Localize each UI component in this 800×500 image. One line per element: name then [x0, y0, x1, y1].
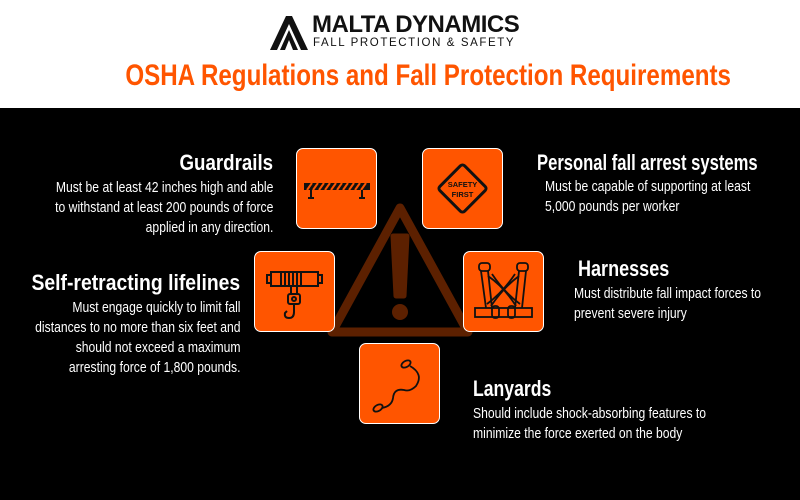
icon box: harness	[463, 251, 544, 332]
logo	[270, 11, 519, 50]
header band	[0, 0, 800, 108]
text: self-retracting lifelines	[31, 270, 240, 376]
text: harnesses: Harnesses	[578, 256, 669, 281]
text: self-retracting lifelines: Must engage quickly to limit fall	[72, 299, 240, 316]
icon box: lanyard	[359, 343, 440, 424]
text: lanyards: minimize the force exerted on the body	[473, 425, 682, 442]
icon box: guardrail	[296, 148, 377, 229]
text: guardrails: to withstand at least 200 pounds of force	[55, 199, 273, 216]
text: personal fall arrest systems: Personal fall arrest systems	[537, 150, 758, 175]
warning triangle	[328, 204, 472, 336]
text: self-retracting lifelines: should not exceed a maximum	[75, 339, 240, 356]
text: self-retracting lifelines: arresting force of 1,800 pounds.	[68, 359, 240, 376]
text: personal fall arrest systems: 5,000 pounds per worker	[545, 198, 679, 215]
text: self-retracting lifelines: distances to no more than six feet and	[35, 319, 240, 336]
text: harnesses	[574, 256, 761, 322]
text: personal fall arrest systems	[537, 150, 758, 215]
text: guardrails	[55, 150, 273, 236]
text: guardrails: Must be at least 42 inches high and able	[56, 179, 273, 196]
text: lanyards: Lanyards	[473, 376, 551, 401]
text: harnesses: prevent severe injury	[574, 305, 687, 322]
icon box: safety first: FIRST	[452, 190, 474, 199]
text: lanyards	[473, 376, 706, 442]
logo: MALTA DYNAMICS	[312, 11, 519, 38]
icon box: safety first	[422, 148, 503, 229]
text: lanyards: Should include shock-absorbing features to	[473, 405, 706, 422]
text: guardrails: Guardrails	[179, 150, 273, 175]
title: OSHA Regulations and Fall Protection Requirements	[125, 59, 731, 92]
text: self-retracting lifelines: Self-retracting lifelines	[31, 270, 240, 295]
text: harnesses: Must distribute fall impact forces to	[574, 285, 761, 302]
icon box: winch	[254, 251, 335, 332]
text: guardrails: applied in any direction.	[145, 219, 273, 236]
logo: FALL PROTECTION & SAFETY	[313, 37, 515, 49]
text: personal fall arrest systems: Must be capable of supporting at least	[545, 178, 750, 195]
icon box: safety first: SAFETY	[448, 180, 477, 189]
